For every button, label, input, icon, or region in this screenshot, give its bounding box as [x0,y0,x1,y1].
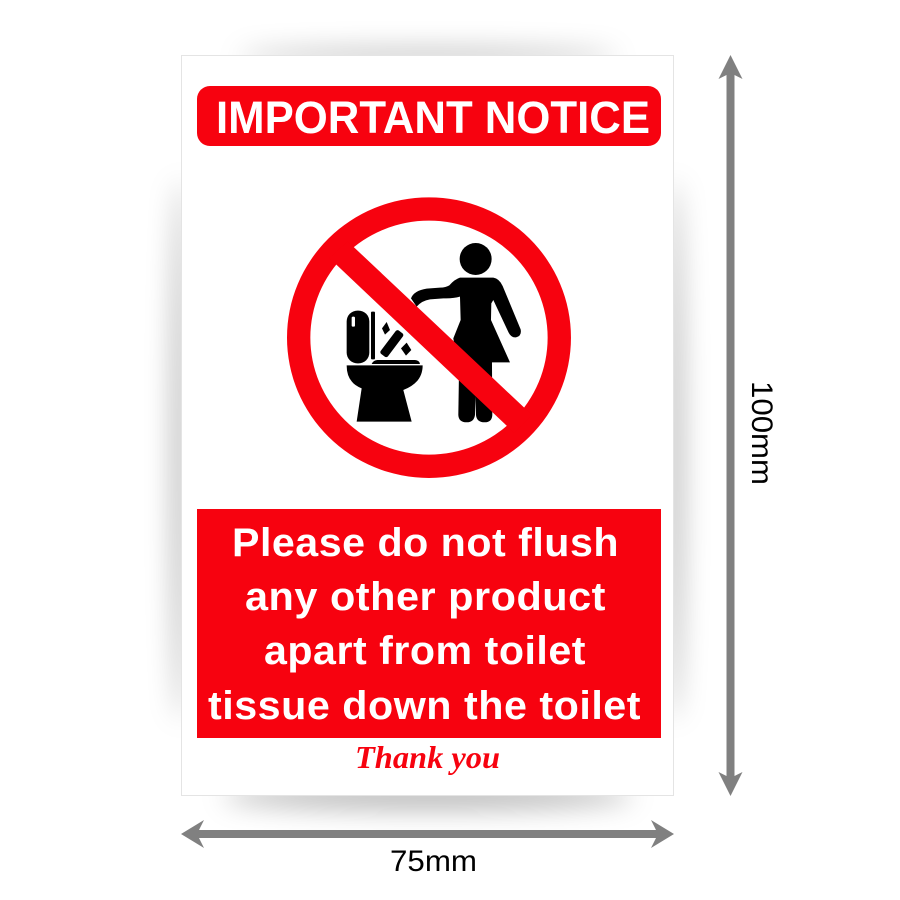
message panel: any other product [245,575,606,619]
message panel: Please do not flush [232,521,619,565]
width arrow [181,820,674,848]
card shadow [172,49,683,810]
icon: woman figure [411,243,521,422]
height label: 100mm [745,381,778,485]
message panel: tissue down the toilet [208,684,641,728]
height arrow [718,55,742,796]
sign card [182,56,674,796]
message panel: apart from toilet [264,629,586,673]
icon: red prohibition ring and slash [287,197,571,478]
heading banner: IMPORTANT NOTICE [216,92,650,143]
width label: 75mm [390,845,477,878]
icon: toilet [347,311,423,422]
message panel [197,509,661,738]
prohibition icon [287,197,571,478]
thank you text: Thank you [355,739,500,775]
